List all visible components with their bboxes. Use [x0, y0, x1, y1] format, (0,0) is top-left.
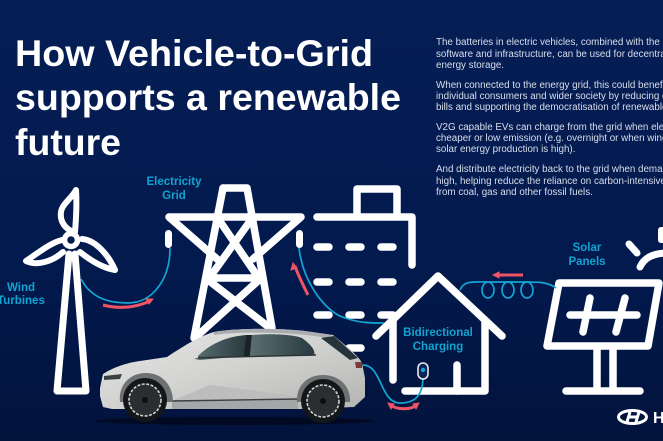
- icon: wind turbine: [26, 190, 115, 391]
- label: bidirectional charging: Bidirectional: [403, 327, 473, 339]
- title: future: [15, 122, 121, 163]
- cables: [81, 248, 556, 403]
- label: wind turbines: Wind: [7, 282, 35, 294]
- label: bidirectional charging: Charging: [413, 341, 463, 353]
- icon: sun: [629, 227, 663, 267]
- red flow arrows: [103, 263, 523, 409]
- icon: wall charger: [418, 363, 428, 379]
- car: [95, 329, 375, 425]
- intro text block: solar energy production is high).: [436, 144, 575, 155]
- logo: Hyundai: [618, 410, 663, 427]
- icon: office building: [317, 189, 412, 348]
- label: electricity grid: Electricity: [147, 176, 202, 188]
- icon: solar panel: [547, 283, 659, 391]
- icon: house: [376, 276, 502, 391]
- label: electricity grid: Grid: [162, 190, 186, 202]
- title: supports a renewable: [15, 77, 401, 118]
- intro text block: from coal, gas and other fossil fuels.: [436, 187, 593, 198]
- icon: electricity pylon: [165, 188, 303, 338]
- title: [15, 33, 401, 163]
- intro text block: energy storage.: [436, 60, 504, 71]
- intro text block: [436, 37, 663, 198]
- title: How Vehicle-to-Grid: [15, 33, 373, 74]
- label: solar panels: Panels: [568, 256, 606, 268]
- label: solar panels: Solar: [573, 242, 602, 254]
